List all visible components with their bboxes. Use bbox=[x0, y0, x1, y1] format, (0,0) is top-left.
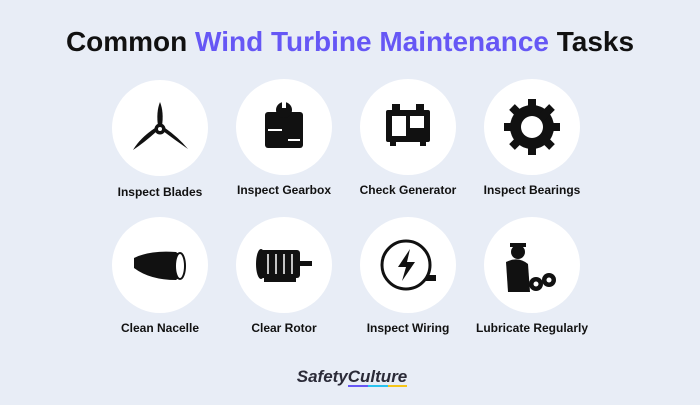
item: Clean Nacelle bbox=[112, 217, 208, 335]
icon: blades bbox=[133, 102, 188, 150]
item: Clean Nacelle: Clean Nacelle bbox=[121, 321, 199, 335]
item: Clear Rotor: Clear Rotor bbox=[251, 321, 317, 335]
icon: nacelle bbox=[134, 252, 185, 280]
item: Lubricate Regularly bbox=[476, 217, 588, 335]
item: Clear Rotor bbox=[236, 217, 332, 335]
item: Inspect Gearbox bbox=[236, 79, 332, 197]
item: Inspect Bearings bbox=[484, 79, 581, 197]
icon: motor bbox=[256, 249, 312, 282]
item: Inspect Wiring bbox=[360, 217, 456, 335]
item: Inspect Blades bbox=[112, 80, 208, 199]
icon: generator bbox=[386, 104, 430, 146]
icon: power plug bbox=[382, 241, 436, 289]
item: Lubricate Regularly: Lubricate Regularly bbox=[476, 321, 588, 335]
item: Check Generator: Check Generator bbox=[360, 183, 457, 197]
title: Common Wind Turbine Maintenance Tasks bbox=[66, 26, 634, 57]
item: Check Generator bbox=[360, 79, 457, 197]
icon: worker with gears bbox=[506, 243, 556, 292]
item: Inspect Wiring: Inspect Wiring bbox=[367, 321, 449, 335]
item: Inspect Gearbox: Inspect Gearbox bbox=[237, 183, 331, 197]
item: Inspect Blades: Inspect Blades bbox=[118, 185, 203, 199]
icon: gear bbox=[504, 99, 560, 155]
item: Inspect Bearings: Inspect Bearings bbox=[484, 183, 581, 197]
logo: SafetyCulture bbox=[297, 367, 407, 386]
icon: gearbox bbox=[265, 100, 303, 148]
